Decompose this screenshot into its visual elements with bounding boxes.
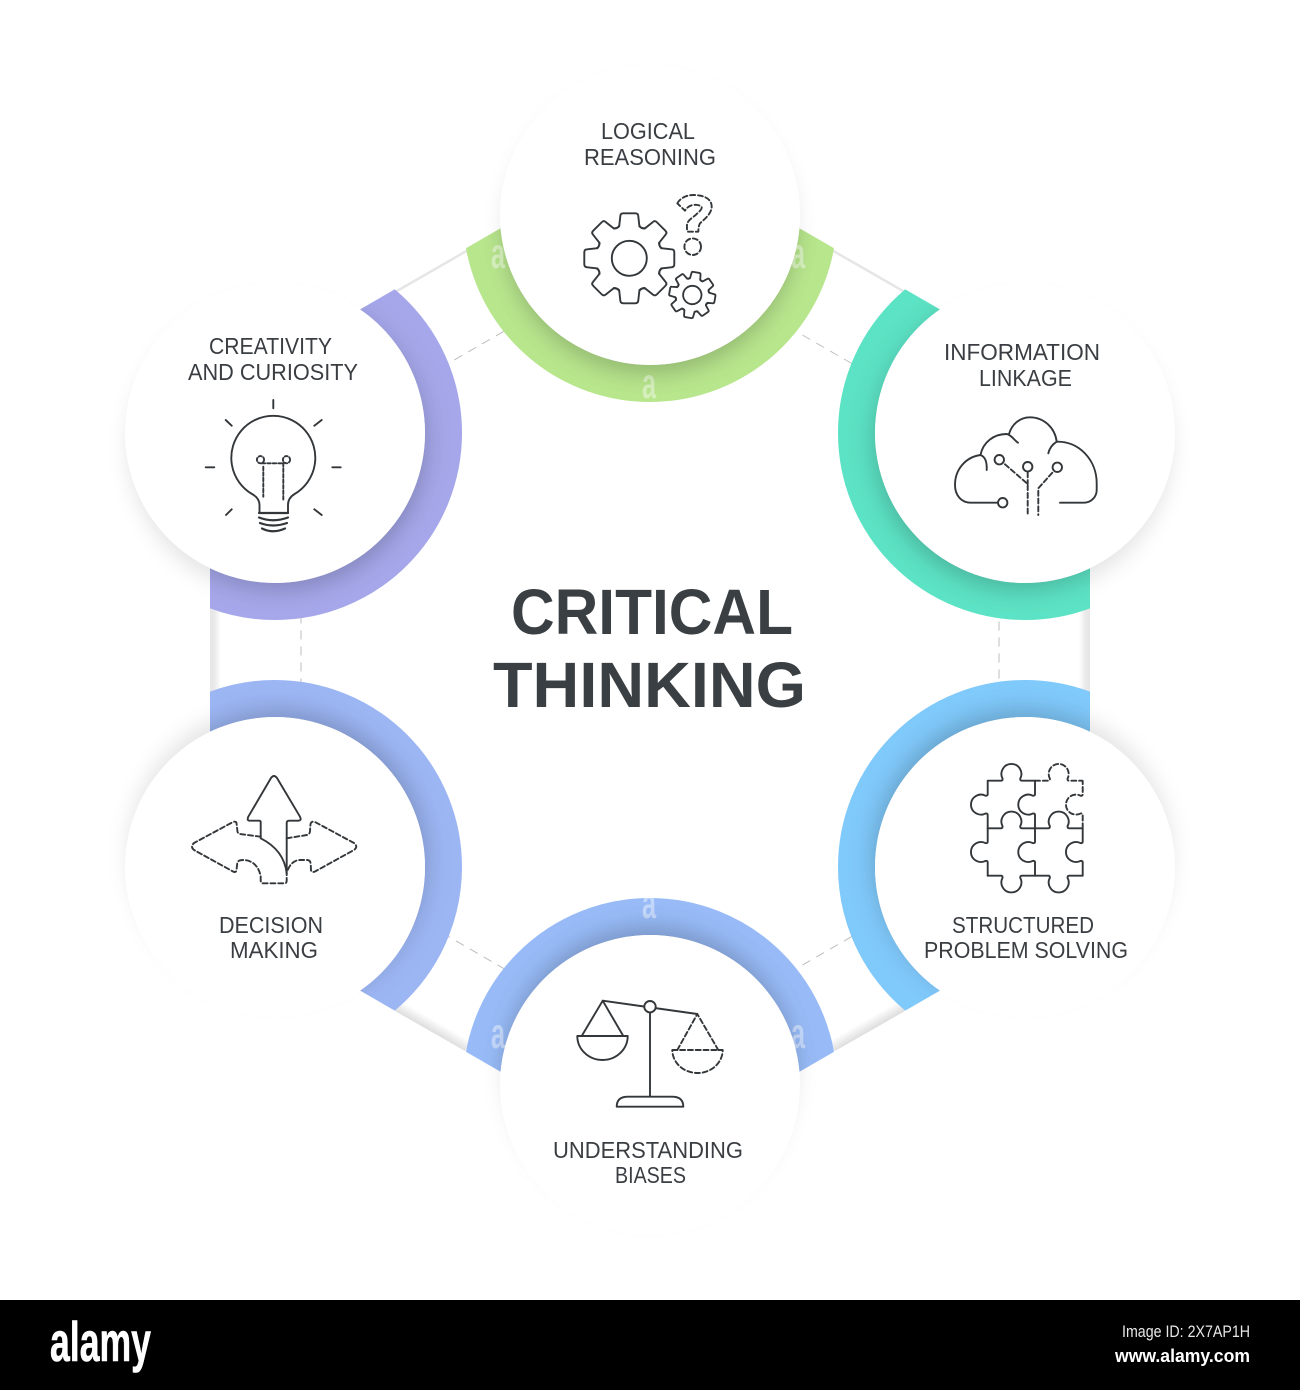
- label: understanding biases: UNDERSTANDING: [553, 1137, 743, 1163]
- label: decision making: [219, 912, 323, 963]
- coloured ring segments: [210, 228, 1090, 1072]
- title: THINKING: [493, 649, 806, 721]
- website: www.alamy.com: [1114, 1346, 1250, 1366]
- watermark glyphs on rings: a: [791, 1010, 806, 1058]
- label: creativity and curiosity: CREATIVITY: [209, 333, 332, 359]
- icon: puzzle pieces: [971, 764, 1083, 892]
- watermark glyphs on rings: a: [491, 1010, 506, 1058]
- label: structured problem solving: [924, 912, 1128, 963]
- label: information linkage: INFORMATION: [944, 339, 1100, 365]
- image id: Image ID: 2X7AP1H: [1122, 1322, 1250, 1341]
- label: creativity and curiosity: AND CURIOSITY: [188, 359, 358, 385]
- label: understanding biases: BIASES: [615, 1162, 686, 1188]
- panel: creativity and curiosity: [188, 333, 358, 531]
- label: information linkage: LINKAGE: [979, 365, 1072, 391]
- label: decision making: DECISION: [219, 912, 323, 938]
- panel: information linkage: [944, 339, 1100, 515]
- icon: balance scale: [577, 1001, 723, 1107]
- label: structured problem solving: PROBLEM SOLVING: [924, 937, 1128, 963]
- label: creativity and curiosity: [188, 333, 358, 385]
- ring: information linkage: [838, 289, 1090, 620]
- label: logical reasoning: LOGICAL: [601, 118, 695, 144]
- panel: decision making: [192, 776, 356, 963]
- watermark glyphs on rings: a: [642, 360, 657, 408]
- ring: structured problem solving: [838, 680, 1090, 1011]
- label: logical reasoning: [584, 118, 716, 170]
- white circles: [125, 65, 1175, 1235]
- watermark glyphs on rings: [491, 230, 806, 1058]
- watermark glyphs on rings: a: [642, 880, 657, 928]
- dashed inner hexagon: [301, 247, 999, 1053]
- ring: decision making: [210, 680, 462, 1010]
- title: CRITICAL: [511, 576, 793, 648]
- footer bar: [0, 1300, 1300, 1390]
- icon: branching arrows: [192, 776, 356, 883]
- title: [493, 576, 806, 721]
- panel: structured problem solving: [924, 764, 1128, 963]
- ring inner shading: [210, 228, 1090, 1074]
- label: decision making: MAKING: [230, 937, 318, 963]
- panel: understanding biases: [553, 1001, 743, 1188]
- alamy logo: alamy: [50, 1310, 151, 1373]
- label: information linkage: [944, 339, 1100, 391]
- hexagon grey connector bands: [210, 249, 1090, 1051]
- label: structured problem solving: STRUCTURED: [952, 912, 1094, 938]
- ring: logical reasoning: [466, 228, 834, 402]
- icon: gears and question mark: [584, 195, 719, 322]
- label: understanding biases: [553, 1137, 743, 1188]
- icon: light bulb: [206, 400, 341, 531]
- circle soft outer shadows: [128, 82, 1172, 1218]
- panel: logical reasoning: [584, 118, 719, 322]
- icon: cloud network: [955, 417, 1097, 515]
- watermark glyphs on rings: a: [491, 230, 506, 278]
- ring: creativity and curiosity: [210, 289, 462, 620]
- ring: understanding biases: [466, 898, 834, 1072]
- label: logical reasoning: REASONING: [584, 144, 716, 170]
- watermark glyphs on rings: a: [791, 230, 806, 278]
